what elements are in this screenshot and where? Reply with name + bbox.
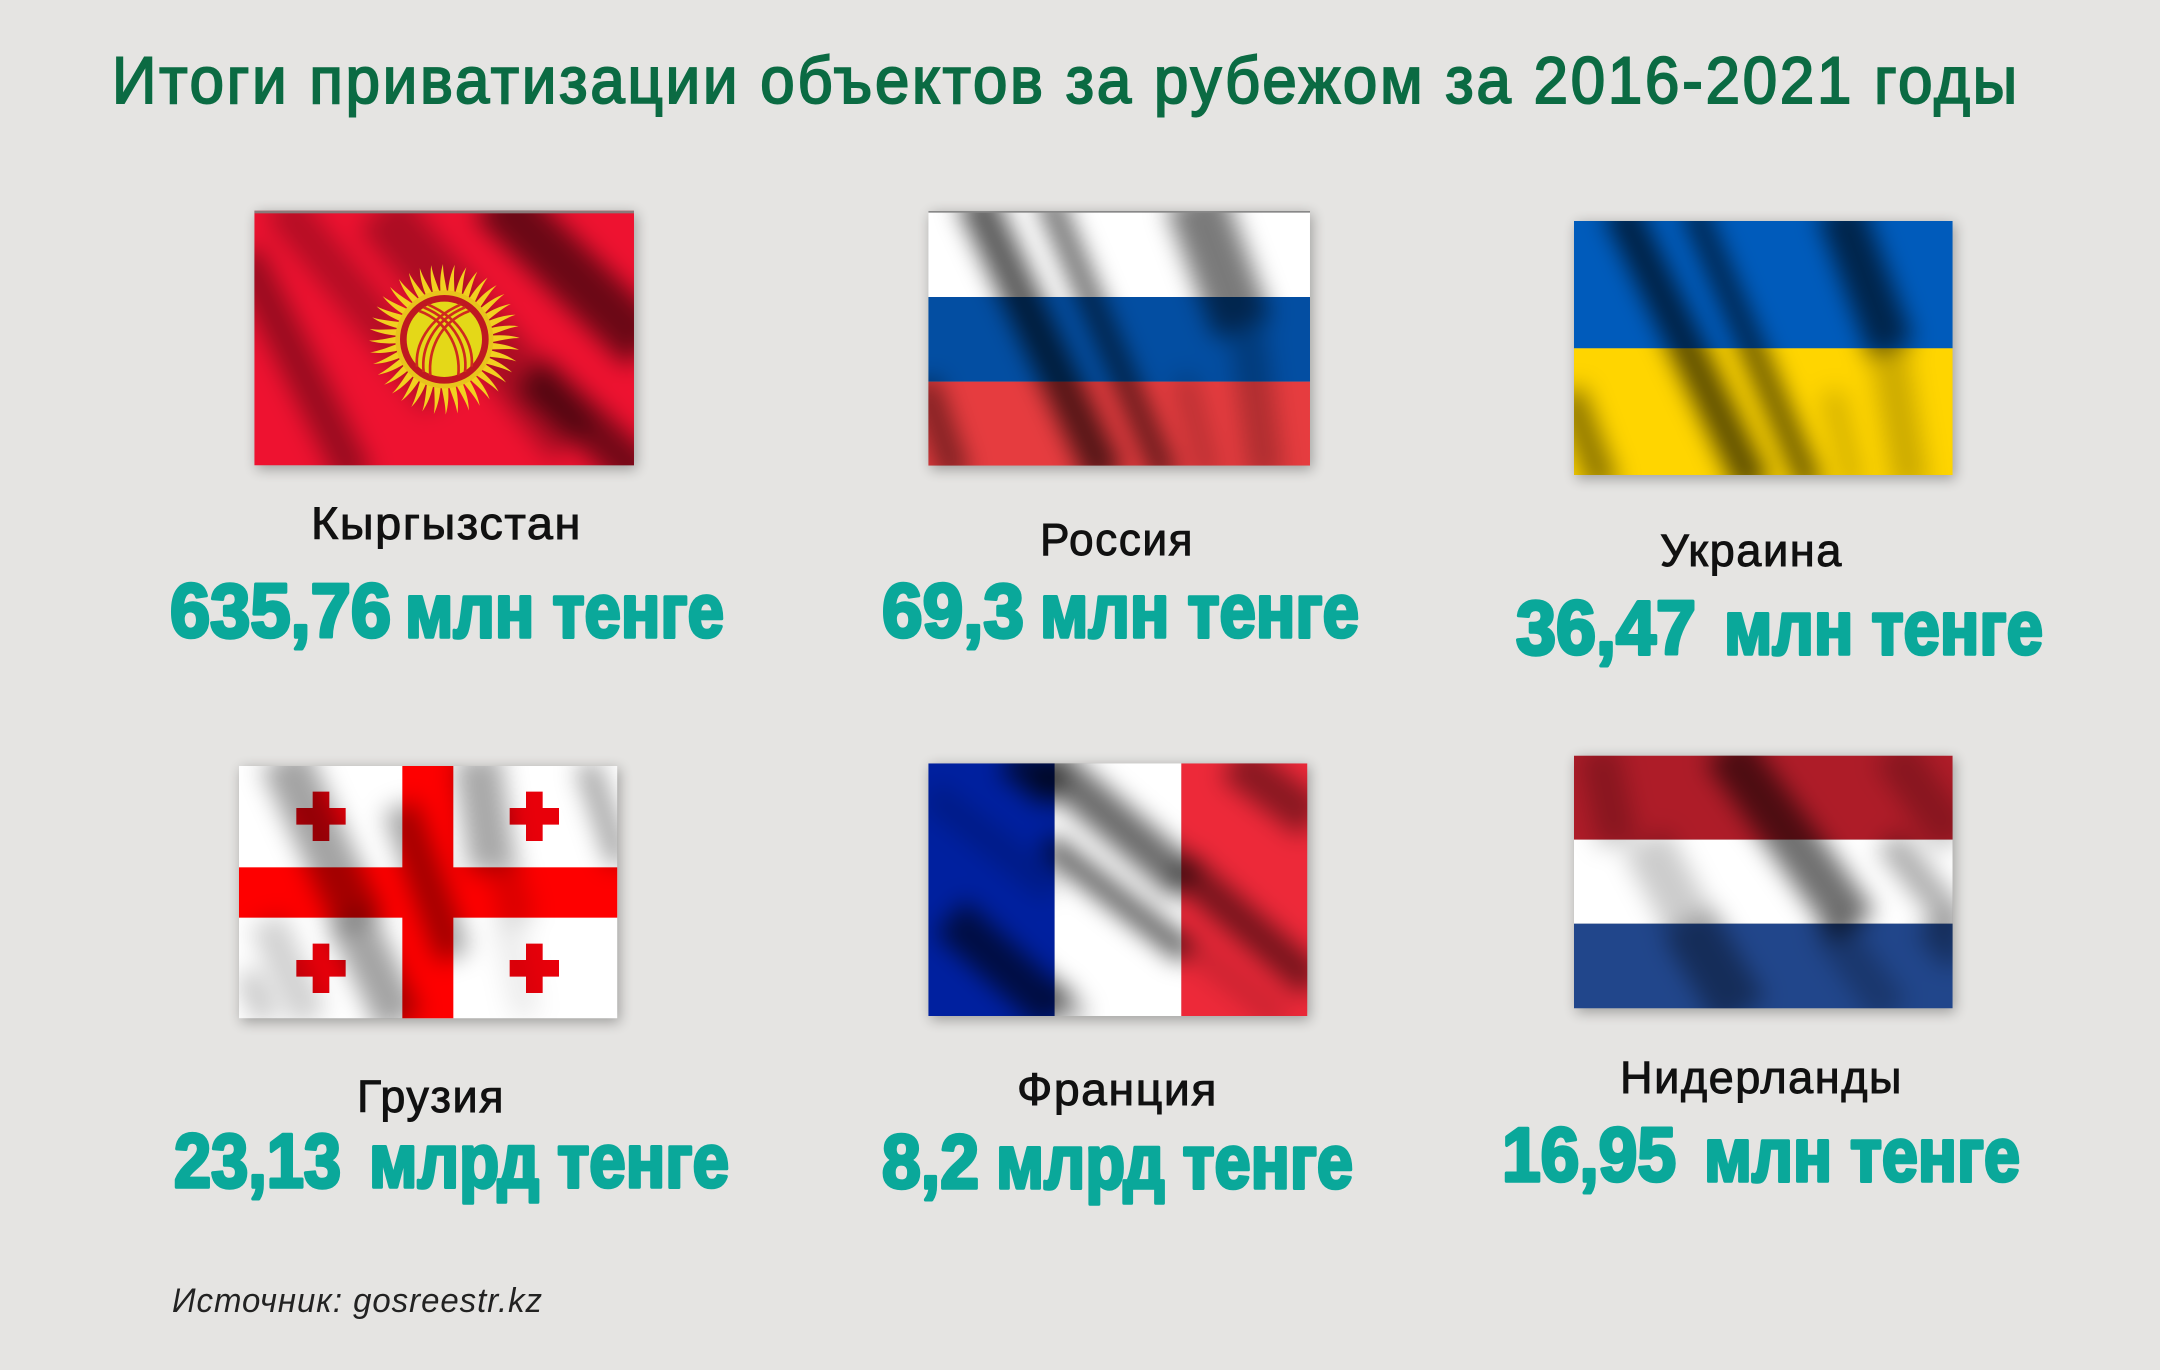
- amount: Kyrgyzstan: 635,76: [170, 569, 391, 654]
- amount: Kyrgyzstan: млн тенге: [405, 569, 724, 654]
- title: Итоги приватизации объектов за рубежом за 2016-2021 годы: [112, 43, 2020, 117]
- flag: Ukraine: [1568, 205, 1955, 488]
- panel: Kyrgyzstan: [170, 197, 724, 654]
- panel: Georgia: [174, 757, 729, 1204]
- amount: Ukraine: 36,47: [1516, 586, 1696, 671]
- amount: Ukraine: [1516, 586, 2043, 671]
- amount: Ukraine: млн тенге: [1724, 586, 2043, 671]
- country label: Georgia: Грузия: [357, 1071, 505, 1122]
- amount: Netherlands: [1502, 1113, 2020, 1198]
- country label: Russia: Россия: [1040, 514, 1194, 565]
- amount: Netherlands: 16,95: [1502, 1113, 1676, 1198]
- country label: Ukraine: Украина: [1660, 525, 1843, 576]
- flag: Georgia: [239, 757, 620, 1023]
- amount: France: [882, 1120, 1353, 1205]
- amount: France: 8,2: [882, 1120, 979, 1205]
- amount: Russia: [882, 569, 1359, 654]
- flag: Russia: [923, 195, 1312, 478]
- flag: Kyrgyzstan: [243, 197, 647, 480]
- panel: Ukraine: [1516, 205, 2043, 671]
- amount: Russia: млн тенге: [1040, 569, 1359, 654]
- panel: Russia: [882, 195, 1359, 654]
- country label: France: Франция: [1017, 1064, 1218, 1115]
- flag: France: [928, 757, 1313, 1020]
- country label: Netherlands: Нидерланды: [1620, 1052, 1903, 1103]
- flag: Netherlands: [1574, 747, 1958, 1013]
- amount: Georgia: [174, 1119, 729, 1204]
- panel: Netherlands: [1502, 747, 2020, 1198]
- amount: Georgia: млрд тенге: [369, 1119, 729, 1204]
- icon: sun emblem: [369, 264, 520, 415]
- amount: Kyrgyzstan: [170, 569, 724, 654]
- panel: France: [882, 757, 1353, 1205]
- amount: France: млрд тенге: [996, 1120, 1353, 1205]
- source note: Источник: gosreestr.kz: [172, 1282, 543, 1320]
- icon: Bolnisi crosses: [296, 792, 559, 993]
- amount: Georgia: 23,13: [174, 1119, 341, 1204]
- amount: Netherlands: млн тенге: [1704, 1113, 2020, 1198]
- amount: Russia: 69,3: [882, 569, 1024, 654]
- country label: Kyrgyzstan: Кыргызстан: [311, 498, 582, 549]
